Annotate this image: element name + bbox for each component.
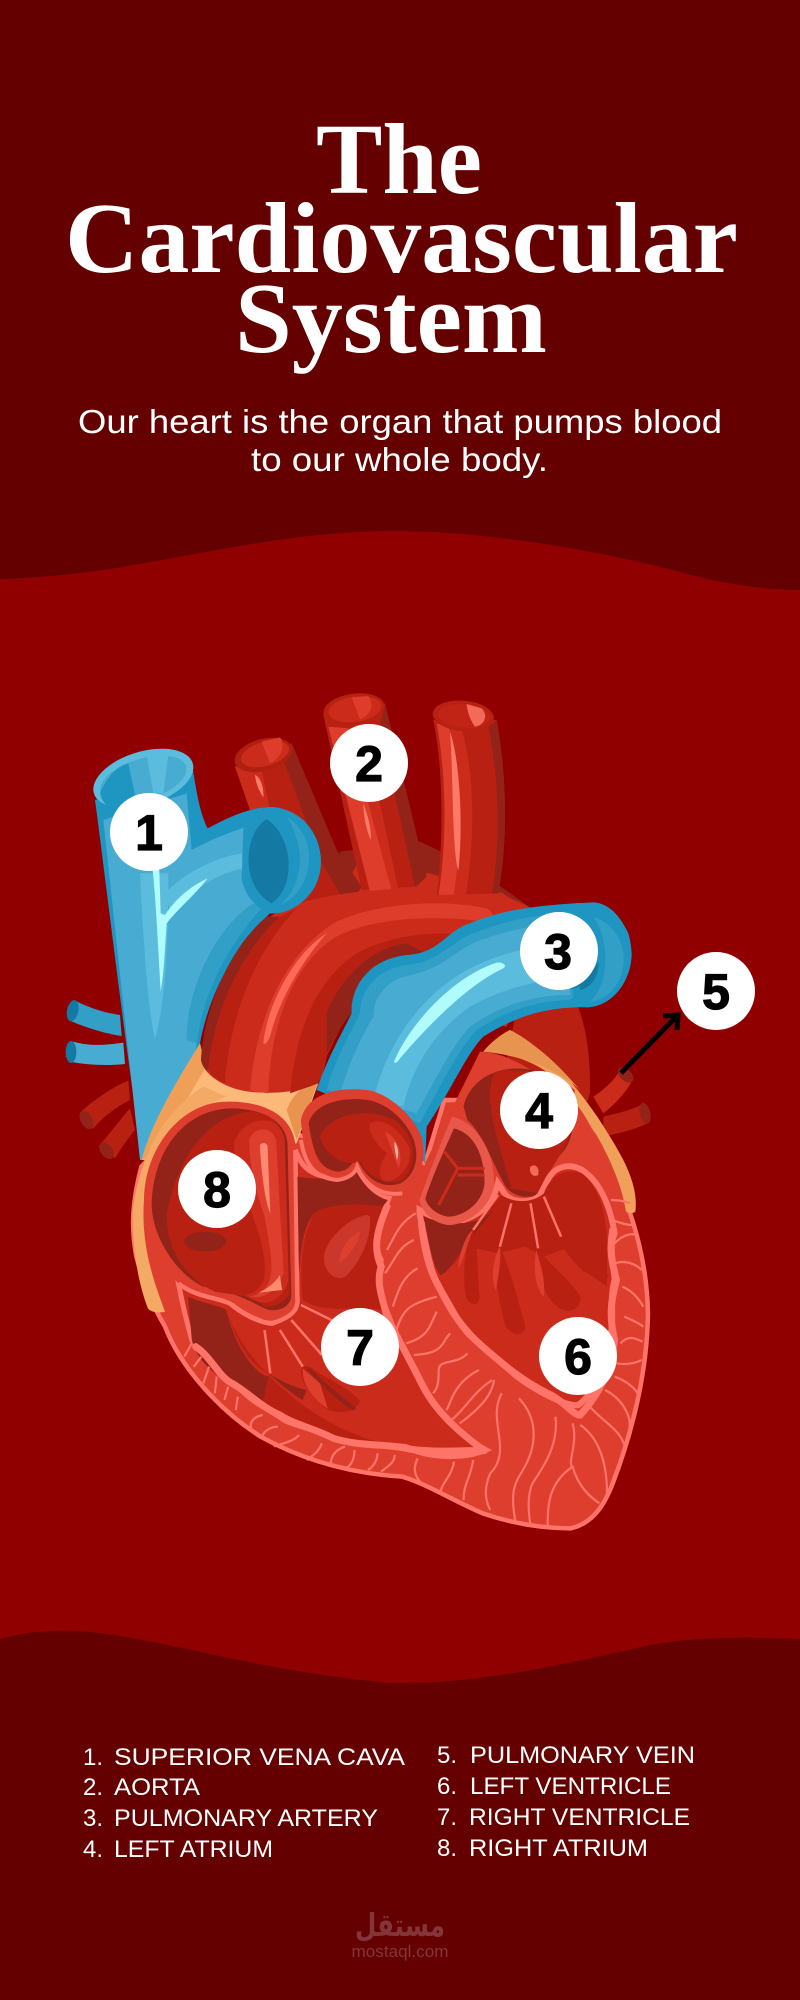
fat band left — [133, 1087, 226, 1312]
upper vessels — [65, 690, 653, 1162]
marker 2 — [330, 724, 408, 802]
left atrium — [464, 1069, 575, 1197]
legend left column: SUPERIOR VENA CAVA — [114, 1744, 405, 1771]
thick muscle walls — [196, 1207, 617, 1451]
pulmonary artery — [317, 902, 632, 1163]
small blue veins — [65, 999, 125, 1065]
aorta branch middle — [321, 690, 427, 892]
legend right column: LEFT VENTRICLE — [470, 1773, 671, 1800]
legend left column: AORTA — [114, 1774, 200, 1801]
legend left column: 1. — [83, 1744, 103, 1771]
watermark: mostaql.com — [352, 1942, 448, 1961]
legend right column: 7. — [437, 1804, 457, 1831]
title: System — [235, 262, 547, 374]
aorta branch left — [231, 732, 362, 923]
heart chambers — [144, 1069, 643, 1527]
legend right column: 8. — [437, 1835, 457, 1862]
marker 3: 3 — [544, 924, 572, 980]
ascending aorta arch — [201, 887, 547, 1093]
right pulmonary veins — [593, 1064, 653, 1137]
legend right column: 5. — [437, 1742, 457, 1769]
heart illustration — [65, 690, 653, 1528]
legend left column: 3. — [83, 1805, 103, 1832]
marker 3 — [520, 912, 598, 990]
heart body — [133, 1030, 648, 1528]
legend left column: PULMONARY ARTERY — [114, 1805, 378, 1832]
marker 1 — [110, 793, 188, 871]
right atrium — [144, 1102, 299, 1323]
legend left column: LEFT ATRIUM — [114, 1836, 273, 1863]
legend right column: 6. — [437, 1773, 457, 1800]
bottom dark wave band — [0, 1631, 800, 2000]
marker 5 — [677, 952, 755, 1030]
marker 4 — [500, 1071, 578, 1149]
title: The — [316, 103, 482, 215]
heart wall outline — [133, 1100, 648, 1528]
legend right column: PULMONARY VEIN — [470, 1742, 695, 1769]
watermark — [352, 1907, 448, 1961]
left ventricle — [420, 1166, 615, 1405]
superior vena cava — [86, 738, 273, 1160]
subtitle — [78, 403, 722, 478]
watermark: مستقل — [355, 1907, 445, 1944]
legend right column: RIGHT ATRIUM — [469, 1835, 648, 1862]
arrow to marker 5 — [621, 1015, 678, 1073]
legend left column: 4. — [83, 1836, 103, 1863]
label circles — [110, 724, 755, 1395]
subtitle: Our heart is the organ that pumps blood — [78, 403, 722, 440]
marker 7 — [321, 1308, 399, 1386]
marker 6 — [539, 1317, 617, 1395]
aortic valve — [301, 1089, 424, 1194]
vena cava branch opening — [242, 807, 321, 914]
top dark wave band — [0, 0, 800, 590]
legend left column — [83, 1744, 405, 1863]
legend right column — [437, 1742, 695, 1862]
fat band — [142, 1030, 636, 1213]
muscle fibres — [184, 1200, 643, 1527]
marker 5: 5 — [702, 964, 730, 1020]
marker 2: 2 — [355, 736, 383, 792]
marker 6: 6 — [564, 1329, 592, 1385]
marker 1: 1 — [135, 805, 163, 861]
aorta branch right — [431, 698, 505, 900]
subtitle: to our whole body. — [251, 441, 548, 478]
title: Cardiovascular — [65, 182, 738, 294]
legend left column: 2. — [83, 1774, 103, 1801]
small left red vessels — [76, 1081, 135, 1162]
left atrium upper wall — [425, 1052, 628, 1200]
title — [65, 103, 738, 374]
marker 8 — [178, 1150, 256, 1228]
right ventricle — [178, 1150, 486, 1457]
legend right column: RIGHT VENTRICLE — [469, 1804, 690, 1831]
marker 8: 8 — [203, 1162, 231, 1218]
marker 7: 7 — [346, 1320, 374, 1376]
mitral valve — [420, 1117, 494, 1225]
marker 4: 4 — [525, 1083, 553, 1139]
back of heart — [333, 842, 590, 1103]
